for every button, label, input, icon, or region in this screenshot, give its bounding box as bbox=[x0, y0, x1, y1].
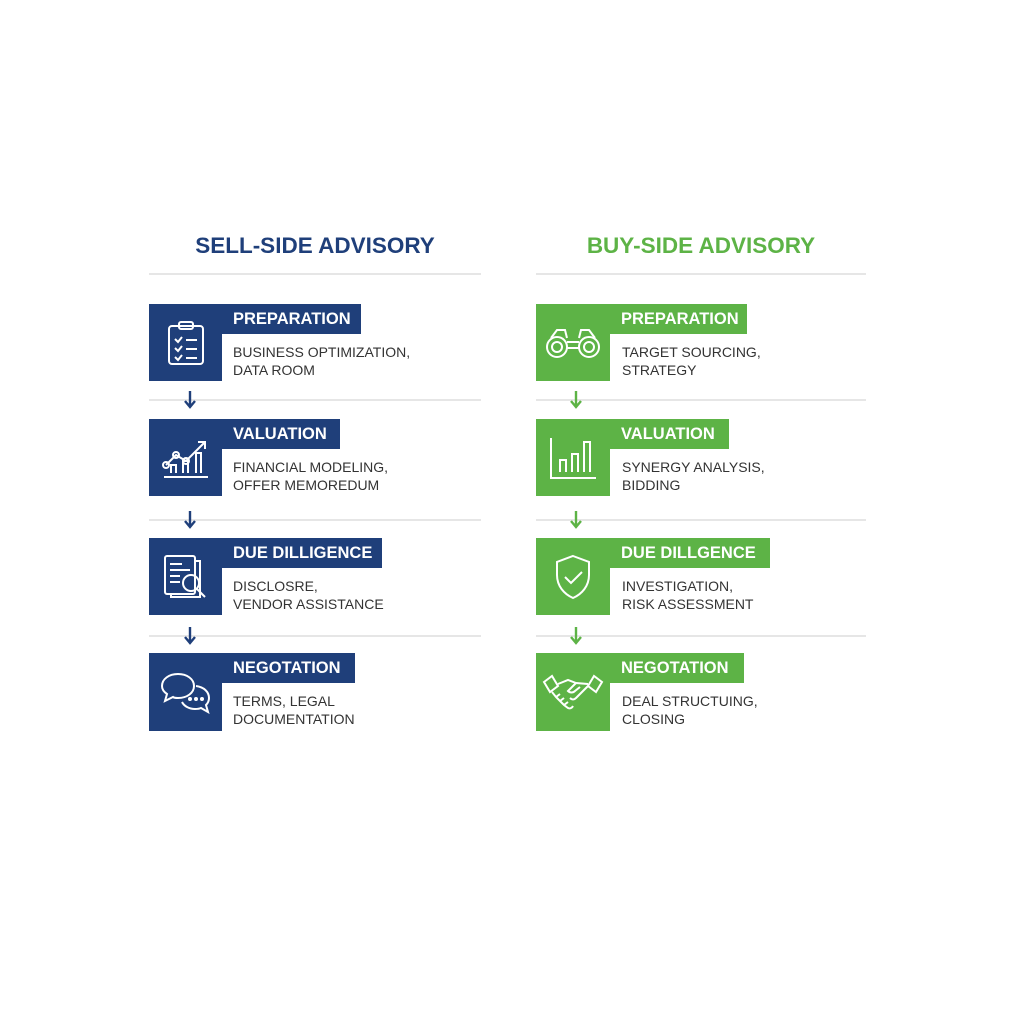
icon: chat bbox=[149, 653, 222, 731]
text: DOCUMENTATION bbox=[233, 711, 355, 727]
heading: buy-side: BUY-SIDE ADVISORY bbox=[587, 233, 815, 258]
label: DUE DILLIGENCE bbox=[233, 544, 372, 562]
panel: sell-side due diligence bbox=[149, 538, 384, 615]
text bbox=[233, 578, 384, 612]
text: DISCLOSRE, bbox=[233, 578, 318, 594]
label bbox=[222, 653, 355, 683]
label: PREPARATION bbox=[233, 310, 351, 328]
panel: buy-side preparation bbox=[536, 304, 761, 381]
label bbox=[222, 538, 382, 568]
icon: bar chart bbox=[536, 419, 610, 496]
heading: sell-side: SELL-SIDE ADVISORY bbox=[195, 233, 435, 258]
label: VALUATION bbox=[233, 425, 327, 443]
label bbox=[610, 304, 747, 334]
text: TARGET SOURCING, bbox=[622, 344, 761, 360]
arrow bbox=[184, 511, 196, 529]
label bbox=[222, 419, 340, 449]
arrow bbox=[184, 627, 196, 645]
text: BIDDING bbox=[622, 477, 680, 493]
label bbox=[222, 304, 361, 334]
panel: buy-side valuation bbox=[536, 419, 765, 496]
text: OFFER MEMOREDUM bbox=[233, 477, 379, 493]
text bbox=[622, 344, 761, 378]
text bbox=[233, 344, 410, 378]
text: BUSINESS OPTIMIZATION, bbox=[233, 344, 410, 360]
text: DEAL STRUCTUING, bbox=[622, 693, 758, 709]
text bbox=[622, 693, 758, 727]
panel: sell-side preparation bbox=[149, 304, 410, 381]
text bbox=[233, 459, 388, 493]
panel: sell-side valuation bbox=[149, 419, 388, 496]
label bbox=[610, 653, 744, 683]
label: DUE DILLGENCE bbox=[621, 544, 756, 562]
text: STRATEGY bbox=[622, 362, 696, 378]
text: TERMS, LEGAL bbox=[233, 693, 335, 709]
icon: document search bbox=[149, 538, 222, 615]
arrow bbox=[570, 391, 582, 409]
label: NEGOTATION bbox=[233, 659, 341, 677]
text: SYNERGY ANALYSIS, bbox=[622, 459, 765, 475]
label bbox=[610, 419, 729, 449]
icon: handshake bbox=[536, 653, 610, 731]
text bbox=[622, 578, 754, 612]
text: FINANCIAL MODELING, bbox=[233, 459, 388, 475]
text: RISK ASSESSMENT bbox=[622, 596, 753, 612]
text bbox=[622, 459, 765, 493]
text: CLOSING bbox=[622, 711, 685, 727]
icon: binoculars bbox=[536, 304, 610, 381]
arrow bbox=[570, 511, 582, 529]
panel: sell-side negotiation bbox=[149, 653, 355, 731]
panel: buy-side negotiation bbox=[536, 653, 758, 731]
icon: clipboard bbox=[149, 304, 222, 381]
text bbox=[233, 693, 355, 727]
text: VENDOR ASSISTANCE bbox=[233, 596, 384, 612]
label bbox=[610, 538, 770, 568]
icon: shield bbox=[536, 538, 610, 615]
text: DATA ROOM bbox=[233, 362, 315, 378]
icon: chart bbox=[149, 419, 222, 496]
label: VALUATION bbox=[621, 425, 715, 443]
label: PREPARATION bbox=[621, 310, 739, 328]
label: NEGOTATION bbox=[621, 659, 729, 677]
text: INVESTIGATION, bbox=[622, 578, 733, 594]
panel: buy-side due diligence bbox=[536, 538, 770, 615]
arrow bbox=[570, 627, 582, 645]
arrow bbox=[184, 391, 196, 409]
